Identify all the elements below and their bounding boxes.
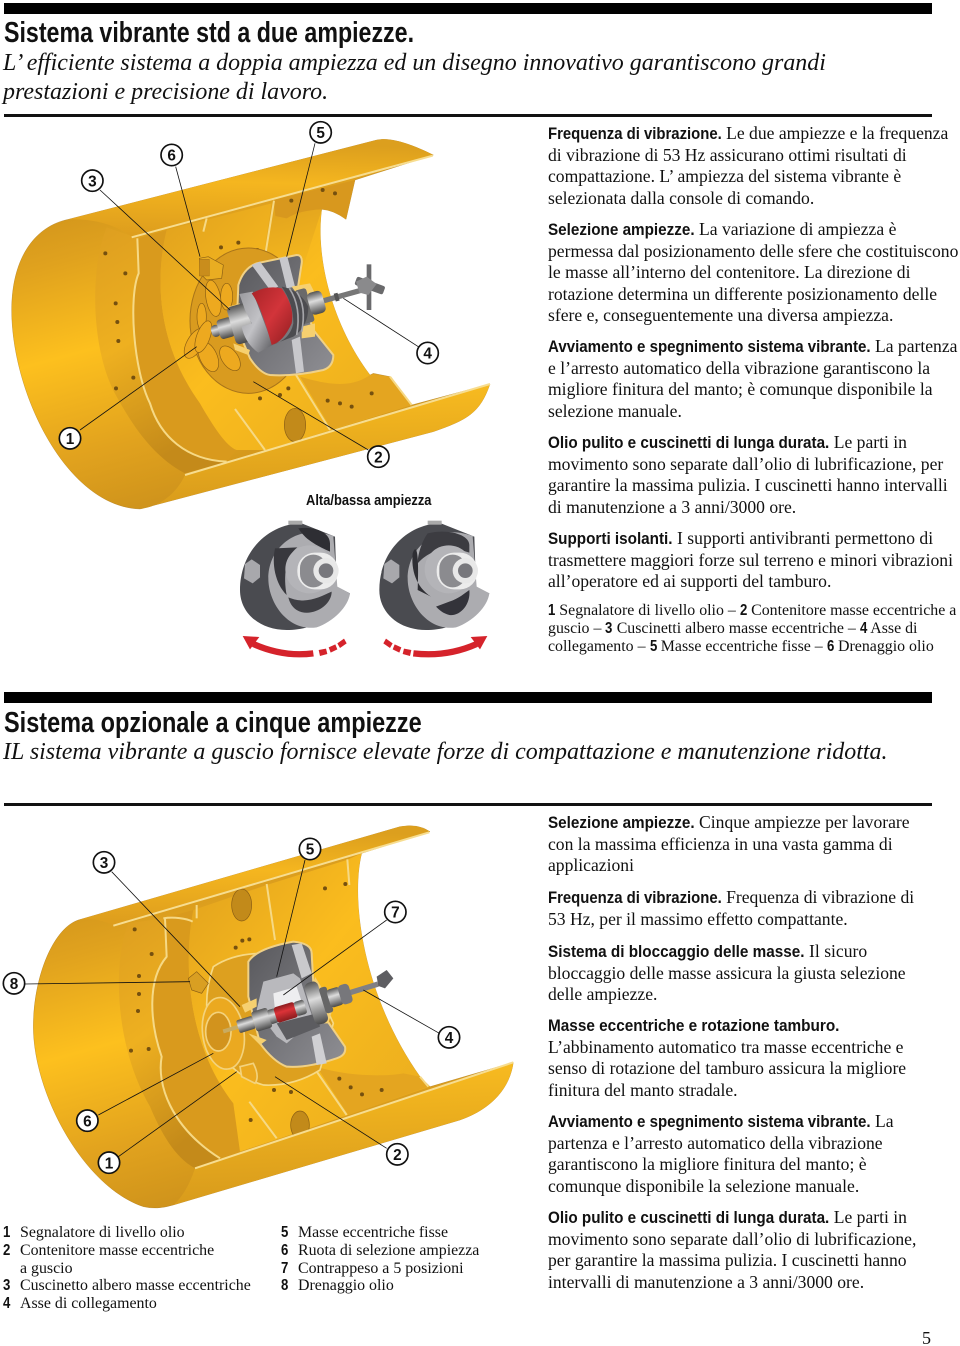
diagram: two-amplitude vibratory drum cutaway: 6	[167, 148, 176, 165]
text: start and stop: La partenza	[875, 336, 957, 356]
eccentric weight illustrations with rotation arrows	[240, 520, 490, 658]
diagram: two-amplitude vibratory drum cutaway: 1	[66, 431, 75, 448]
text: amplitude selection: Cinque ampiezze per lavorare	[699, 812, 910, 832]
parts legend column 2: Ruota di selezione ampiezza	[298, 1242, 479, 1259]
text: clean oil and bearings: di manutenzione a 3 anni/3000 ore.	[548, 496, 796, 516]
bolt holes	[129, 882, 384, 1122]
lubrication hole	[284, 408, 306, 442]
housing ribs	[252, 257, 304, 373]
top flange strip	[68, 139, 433, 237]
second section heavy rule	[4, 692, 932, 703]
text: clean oil and bearings: Le parti in	[834, 432, 907, 452]
text: amplitude selection: applicazioni	[548, 855, 634, 875]
parts legend: two-amplitude: 5	[650, 638, 657, 655]
cutaway counterweight	[257, 943, 327, 1065]
text: vibration frequency: Frequenza di vibrazione.	[548, 888, 722, 907]
parts legend column 2: 8	[281, 1277, 288, 1294]
left weight: high amplitude	[240, 521, 350, 630]
text: eccentric masses and rotation: Masse eccentriche e rotazione tamburo.	[548, 1016, 839, 1035]
parts legend column 1: Asse di collegamento	[20, 1295, 157, 1312]
diagram: five-amplitude vibratory drum cutaway: 8	[10, 976, 19, 993]
diagram: five-amplitude vibratory drum cutaway	[2, 826, 514, 1208]
text: isolation mounts: trasmettere maggiori forze sul terreno e minori vibrazioni	[548, 550, 953, 570]
text: start and stop: partenza e l’arresto automatico della vibrazione	[548, 1132, 883, 1152]
text: vibration frequency: selezionata dalla console di comando.	[548, 188, 814, 208]
second section rule	[4, 803, 932, 806]
subtitle: two-amplitude system	[2, 50, 826, 105]
parts legend column 1: Segnalatore di livello olio	[20, 1224, 185, 1241]
text: vibration frequency	[548, 887, 914, 929]
rotor discs	[239, 287, 308, 353]
drum shell silhouette	[12, 139, 490, 509]
text: clean oil and bearings: Le parti in	[834, 1207, 907, 1227]
diagram: five-amplitude vibratory drum cutaway: 4	[445, 1030, 454, 1047]
cream seal inserts	[242, 977, 333, 1045]
top heavy rule	[4, 3, 932, 14]
text: clean oil and bearings	[548, 432, 948, 516]
callout numbers	[59, 122, 438, 467]
diagram: two-amplitude vibratory drum cutaway	[11, 120, 490, 510]
cream web edges	[152, 859, 428, 1158]
parts legend column 2: 5	[281, 1224, 288, 1241]
lubrication holes	[232, 889, 309, 1139]
lower right plate	[300, 375, 412, 429]
text: start and stop: La	[875, 1111, 894, 1131]
text: amplitude selection: Selezione ampiezze.	[548, 220, 695, 239]
diagram: five-amplitude vibratory drum cutaway: 5	[306, 842, 315, 859]
flange edges	[113, 832, 513, 1168]
text: amplitude selection: sfere e, conseguentemente una diversa ampiezza.	[548, 305, 893, 325]
grey eccentric housing	[248, 942, 345, 1067]
right red arrow	[383, 636, 487, 656]
bottom shell strip	[173, 1062, 513, 1205]
heading: two-amplitude system: Sistema vibrante std a due ampiezze.	[4, 17, 414, 49]
shaft ends	[206, 271, 370, 351]
section rule	[4, 114, 932, 117]
parts legend column 2	[281, 1224, 480, 1294]
text: start and stop	[548, 336, 958, 420]
text: start and stop: Avviamento e spegnimento sistema vibrante.	[548, 1112, 871, 1131]
text: amplitude selection	[548, 812, 910, 875]
diagram: five-amplitude vibratory drum cutaway: 1	[105, 1155, 114, 1172]
text: start and stop: garantiscono la migliore finitura del manto; è	[548, 1154, 867, 1174]
subtitle: five-amplitude system: IL sistema vibrante a guscio fornisce elevate forze di compattazione e manutenzione ridotta.	[3, 739, 887, 765]
parts legend: two-amplitude: Segnalatore di livello olio – Contenitore masse eccentriche a	[559, 602, 956, 619]
text: isolation mounts: all’operatore ed ai supporti del tamburo.	[548, 571, 831, 591]
flange edges	[132, 156, 490, 475]
selection wheel	[198, 995, 257, 1083]
text: start and stop: comunque disponibile la selezione manuale.	[548, 1176, 859, 1196]
text: mass locking system: bloccaggio delle masse assicura la giusta selezione	[548, 962, 906, 982]
text: mass locking system	[548, 941, 906, 1004]
first baffle face	[95, 227, 227, 473]
cream web edges	[133, 201, 412, 462]
text: start and stop: e l’arresto automatico della vibrazione garantiscono la	[548, 358, 930, 378]
parts legend: two-amplitude: 3	[605, 620, 613, 637]
second baffle band	[152, 910, 240, 1158]
text: vibration frequency: Frequenza di vibrazione.	[548, 124, 722, 143]
caption: high/low amplitude: Alta/bassa ampiezza	[306, 492, 431, 509]
heading: five-amplitude system: Sistema opzionale a cinque ampiezze	[4, 707, 422, 739]
parts legend: two-amplitude: guscio – Cuscinetti albero masse eccentriche – Asse di	[548, 620, 917, 637]
text: amplitude selection: le masse all’interno del contenitore. La direzione di	[548, 262, 910, 282]
right weight: low amplitude	[379, 521, 489, 630]
central plate	[189, 853, 430, 1152]
cream seal inserts	[228, 283, 315, 355]
parts legend column 2: 6	[281, 1242, 288, 1259]
text: vibration frequency: compattazione. L’ ampiezza del sistema vibrante è	[548, 166, 901, 186]
text: start and stop: Avviamento e spegnimento sistema vibrante.	[548, 337, 871, 356]
text: vibration frequency: Frequenza di vibrazione di	[726, 887, 914, 907]
diagram: five-amplitude vibratory drum cutaway: 7	[391, 905, 400, 922]
text: clean oil and bearings	[548, 1207, 916, 1292]
parts legend: two-amplitude: collegamento – Masse eccentriche fisse – Drenaggio olio	[548, 638, 934, 655]
text: vibration frequency	[548, 123, 948, 208]
diagram: two-amplitude vibratory drum cutaway: 4	[423, 346, 432, 363]
drum shell silhouette	[33, 826, 513, 1208]
shaft with red bearing	[217, 963, 384, 1052]
parts legend: two-amplitude: 1	[548, 602, 555, 619]
text: mass locking system: Il sicuro	[809, 941, 867, 961]
text: eccentric masses and rotation	[548, 1016, 906, 1100]
text: amplitude selection: permessa dal posizionamento delle sfere che costituiscono	[548, 240, 958, 260]
text: eccentric masses and rotation: L’abbinamento automatico tra masse eccentriche e	[548, 1036, 903, 1056]
text: mass locking system: delle ampiezze.	[548, 984, 657, 1004]
parts legend column 1: 1	[3, 1224, 10, 1241]
diagram: two-amplitude vibratory drum cutaway: 3	[88, 173, 97, 190]
oil drain plug	[188, 972, 208, 993]
text: clean oil and bearings: Olio pulito e cuscinetti di lunga durata.	[548, 433, 829, 452]
oil drain plug	[199, 257, 223, 280]
hub disc	[190, 248, 307, 393]
parts legend column 2: Drenaggio olio	[298, 1277, 394, 1294]
text: amplitude selection: Selezione ampiezze.	[548, 813, 695, 832]
diagram: two-amplitude vibratory drum cutaway: 2	[374, 449, 383, 466]
universal joint	[354, 264, 385, 310]
lower right plate	[317, 1067, 428, 1115]
text: vibration frequency: di vibrazione di 53 Hz assicurano ottimi risultati di	[548, 144, 907, 164]
callout leader lines	[80, 143, 418, 450]
top flange strip	[78, 826, 430, 926]
parts legend column 2: Contrappeso a 5 posizioni	[298, 1260, 464, 1277]
red bearing cylinder	[252, 287, 292, 345]
parts legend column 1: a guscio	[20, 1260, 73, 1277]
parts legend: two-amplitude: 6	[827, 638, 834, 655]
text: start and stop	[548, 1111, 894, 1196]
callout leader lines	[25, 860, 439, 1157]
eccentric fan blades	[180, 279, 245, 375]
parts legend column 1: 3	[3, 1277, 10, 1294]
text: start and stop: migliore finitura del manto; è comunque disponibile la	[548, 379, 933, 399]
bolt holes	[103, 188, 374, 409]
text: eccentric masses and rotation: finitura del manto stradale.	[548, 1080, 738, 1100]
parts legend column 1: 2	[3, 1242, 10, 1259]
subtitle: two-amplitude system: prestazioni e precisione di lavoro.	[3, 79, 328, 105]
parts legend column 1: 4	[3, 1295, 10, 1312]
first baffle face	[119, 918, 220, 1168]
left red arrow	[243, 636, 347, 656]
second baffle band	[133, 230, 237, 462]
universal joint	[377, 970, 393, 988]
text: amplitude selection: con la massima efficienza in una vasta gamma di	[548, 834, 893, 854]
bottom shell strip	[140, 384, 490, 509]
text: amplitude selection: rotazione determina un differente posizionamento delle	[548, 284, 937, 304]
parts legend column 1: Cuscinetto albero masse eccentriche	[20, 1277, 251, 1294]
text: isolation mounts: I supporti antivibranti permettono di	[677, 528, 933, 548]
text: amplitude selection: La variazione di ampiezza è	[699, 219, 896, 239]
text: clean oil and bearings: Olio pulito e cuscinetti di lunga durata.	[548, 1208, 829, 1227]
diagram: five-amplitude vibratory drum cutaway: 2	[393, 1147, 402, 1164]
grey eccentric housing	[237, 255, 333, 375]
text: vibration frequency: 53 Hz, per il massimo effetto compattante.	[548, 908, 848, 928]
parts legend: two-amplitude	[548, 602, 956, 655]
parts legend column 1: Contenitore masse eccentriche	[20, 1242, 214, 1259]
diagram: five-amplitude vibratory drum cutaway: 3	[100, 855, 108, 872]
text: clean oil and bearings: movimento sono separate dall’olio di lubrificazione, per	[548, 454, 943, 474]
central plate	[160, 203, 412, 450]
parts legend column 2: 7	[281, 1260, 288, 1277]
callout numbers	[3, 838, 460, 1173]
text: clean oil and bearings: intervalli di manutenzione a 3 anni/3000 ore.	[548, 1272, 864, 1292]
parts legend column 1	[3, 1224, 251, 1312]
parts legend: two-amplitude: 2	[740, 602, 747, 619]
text: isolation mounts: Supporti isolanti.	[548, 529, 673, 548]
diagram: two-amplitude vibratory drum cutaway: 5	[316, 125, 325, 142]
hub disc	[207, 950, 333, 1085]
text: mass locking system: Sistema di bloccaggio delle masse.	[548, 942, 805, 961]
diagram: five-amplitude vibratory drum cutaway: 6	[83, 1113, 92, 1130]
text: clean oil and bearings: garantire la massima pulizia. I cuscinetti hanno intervalli	[548, 475, 948, 495]
parts legend column 2: Masse eccentriche fisse	[298, 1224, 448, 1241]
text: isolation mounts	[548, 528, 953, 591]
text: start and stop: selezione manuale.	[548, 400, 682, 420]
text: vibration frequency: Le due ampiezze e la frequenza	[726, 123, 948, 143]
upper rear plate	[274, 180, 355, 219]
text: clean oil and bearings: per garantire la massima pulizia. I cuscinetti hanno	[548, 1250, 907, 1270]
subtitle: two-amplitude system: L’ efficiente sistema a doppia ampiezza ed un disegno innovativo garantiscono grandi	[3, 50, 826, 76]
text: clean oil and bearings: movimento sono separate dall’olio di lubrificazione,	[548, 1228, 916, 1248]
parts legend: two-amplitude: 4	[860, 620, 867, 637]
text: amplitude selection	[548, 219, 958, 325]
text: eccentric masses and rotation: senso di rotazione del tamburo assicura la migliore	[548, 1058, 906, 1078]
